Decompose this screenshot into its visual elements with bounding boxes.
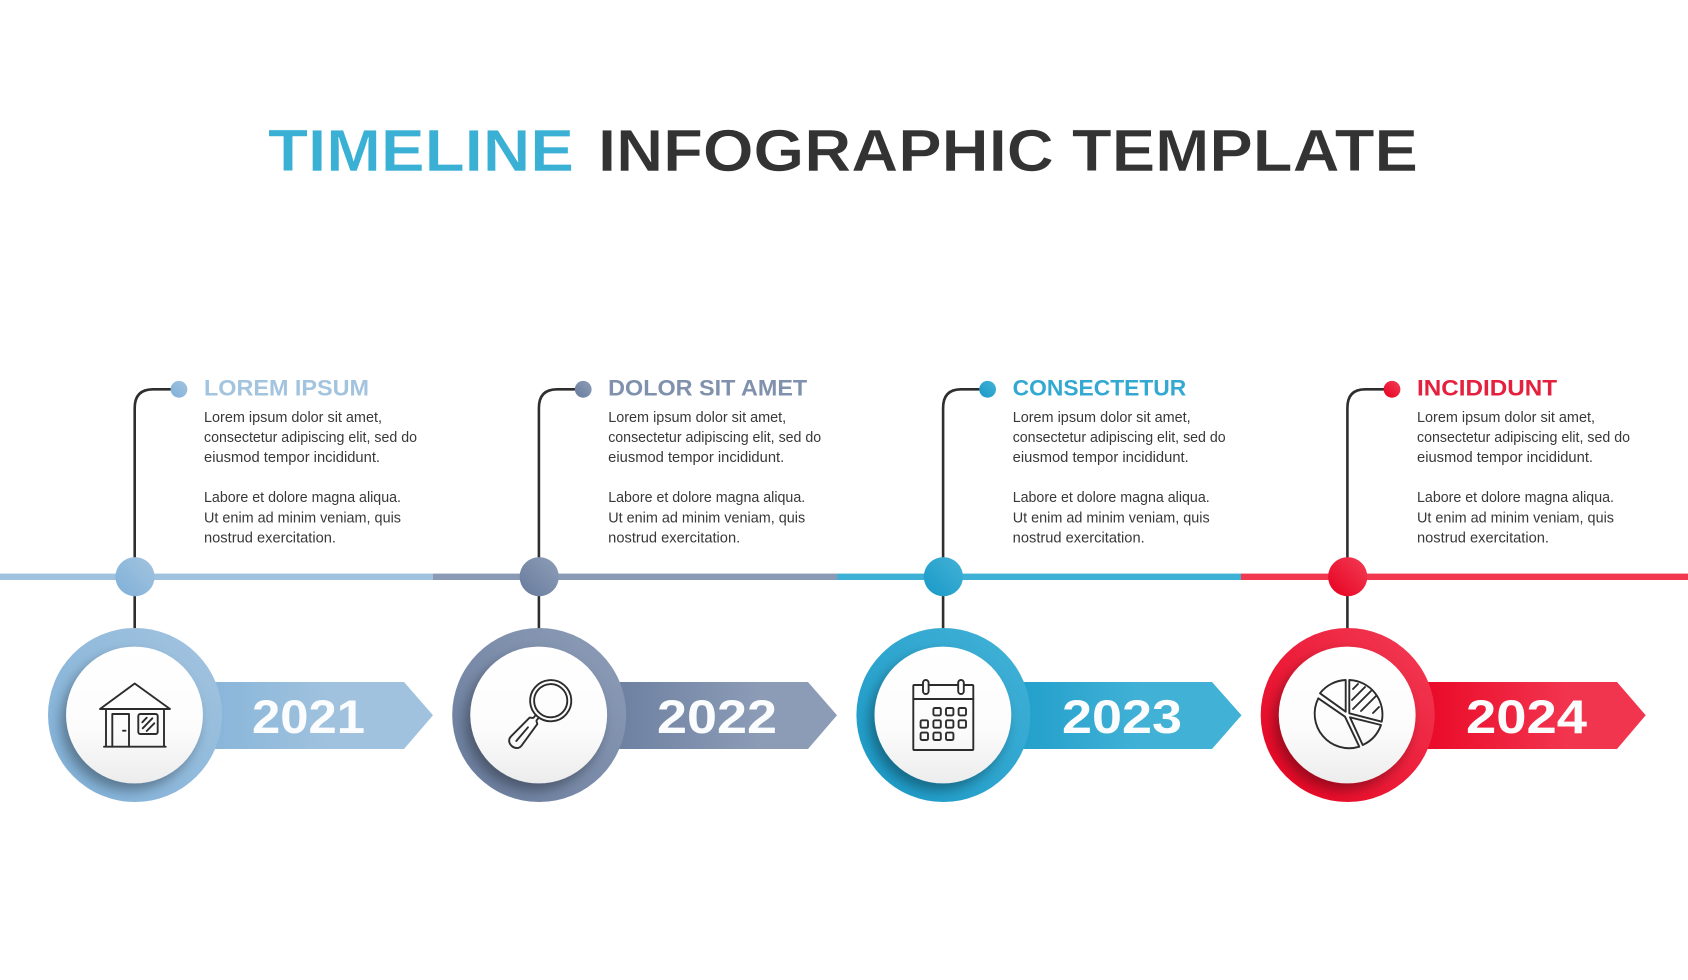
description 2024: Ut enim ad minim veniam, quis	[1417, 510, 1614, 526]
description 2021: nostrud exercitation.	[204, 530, 336, 546]
description 2022: eiusmod tempor incididunt.	[608, 450, 784, 466]
icon: magnifier	[496, 672, 580, 760]
description 2023: Lorem ipsum dolor sit amet,	[1013, 410, 1191, 426]
title: TIMELINE	[268, 118, 574, 184]
top dot 2021	[171, 381, 187, 398]
milestone 2021	[48, 376, 433, 802]
connector 2023	[943, 389, 980, 630]
year arrow 2023	[988, 682, 1242, 749]
connector 2021	[135, 389, 172, 630]
description 2021: Ut enim ad minim veniam, quis	[204, 510, 401, 526]
description 2021: Labore et dolore magna aliqua.	[204, 490, 401, 506]
ring 2021	[48, 628, 222, 802]
description 2022: Labore et dolore magna aliqua.	[608, 490, 805, 506]
white disc 2022	[470, 647, 607, 783]
ring 2024	[1261, 628, 1435, 802]
description 2021	[204, 410, 417, 546]
connector 2024	[1347, 389, 1385, 630]
title	[268, 118, 1418, 184]
ring 2023	[856, 628, 1030, 802]
top dot 2023	[979, 381, 996, 398]
description 2024	[1417, 410, 1630, 546]
description 2023	[1013, 410, 1226, 546]
axis node 2023	[924, 557, 963, 596]
description 2024: Lorem ipsum dolor sit amet,	[1417, 410, 1595, 426]
axis node 2024	[1328, 557, 1367, 596]
white disc 2021	[66, 647, 203, 783]
axis node 2022	[520, 557, 559, 596]
description 2023: consectetur adipiscing elit, sed do	[1013, 430, 1226, 446]
milestone 2023	[856, 376, 1242, 802]
description 2021: Lorem ipsum dolor sit amet,	[204, 410, 382, 426]
heading: Incididunt: INCIDIDUNT	[1417, 376, 1558, 401]
description 2022: nostrud exercitation.	[608, 530, 740, 546]
icon: pie chart	[1315, 680, 1382, 748]
white disc 2023	[874, 647, 1011, 783]
year arrow 2022	[584, 682, 837, 749]
description 2024: consectetur adipiscing elit, sed do	[1417, 430, 1630, 446]
description 2023: Labore et dolore magna aliqua.	[1013, 490, 1210, 506]
year arrow 2022: 2022	[657, 691, 777, 744]
white disc 2024	[1279, 647, 1416, 783]
description 2021: eiusmod tempor incididunt.	[204, 450, 380, 466]
description 2022: Lorem ipsum dolor sit amet,	[608, 410, 786, 426]
top dot 2024	[1384, 381, 1400, 398]
connector 2022	[539, 389, 576, 630]
description 2024: eiusmod tempor incididunt.	[1417, 450, 1593, 466]
heading: Lorem Ipsum: LOREM IPSUM	[204, 376, 369, 401]
heading: Consectetur: CONSECTETUR	[1013, 376, 1186, 401]
description 2023: eiusmod tempor incididunt.	[1013, 450, 1189, 466]
milestone 2022	[452, 376, 837, 802]
year arrow 2024: 2024	[1466, 691, 1588, 744]
icon: house	[100, 684, 170, 747]
ring 2022	[452, 628, 626, 802]
axis node 2021	[115, 557, 155, 596]
description 2024: Labore et dolore magna aliqua.	[1417, 490, 1614, 506]
title: INFOGRAPHIC TEMPLATE	[598, 118, 1418, 184]
timeline axis	[0, 574, 1688, 580]
year arrow 2023: 2023	[1062, 691, 1182, 744]
description 2023: Ut enim ad minim veniam, quis	[1013, 510, 1210, 526]
description 2021: consectetur adipiscing elit, sed do	[204, 430, 417, 446]
description 2022	[608, 410, 821, 546]
description 2022: consectetur adipiscing elit, sed do	[608, 430, 821, 446]
year arrow 2021	[180, 682, 433, 749]
year arrow 2024	[1392, 682, 1646, 749]
description 2022: Ut enim ad minim veniam, quis	[608, 510, 805, 526]
icon: calendar	[913, 680, 973, 750]
heading: Dolor Sit Amet: DOLOR SIT AMET	[608, 376, 808, 401]
description 2024: nostrud exercitation.	[1417, 530, 1549, 546]
year arrow 2021: 2021	[252, 691, 365, 744]
top dot 2022	[575, 381, 592, 398]
milestone 2024	[1261, 376, 1646, 802]
description 2023: nostrud exercitation.	[1013, 530, 1145, 546]
